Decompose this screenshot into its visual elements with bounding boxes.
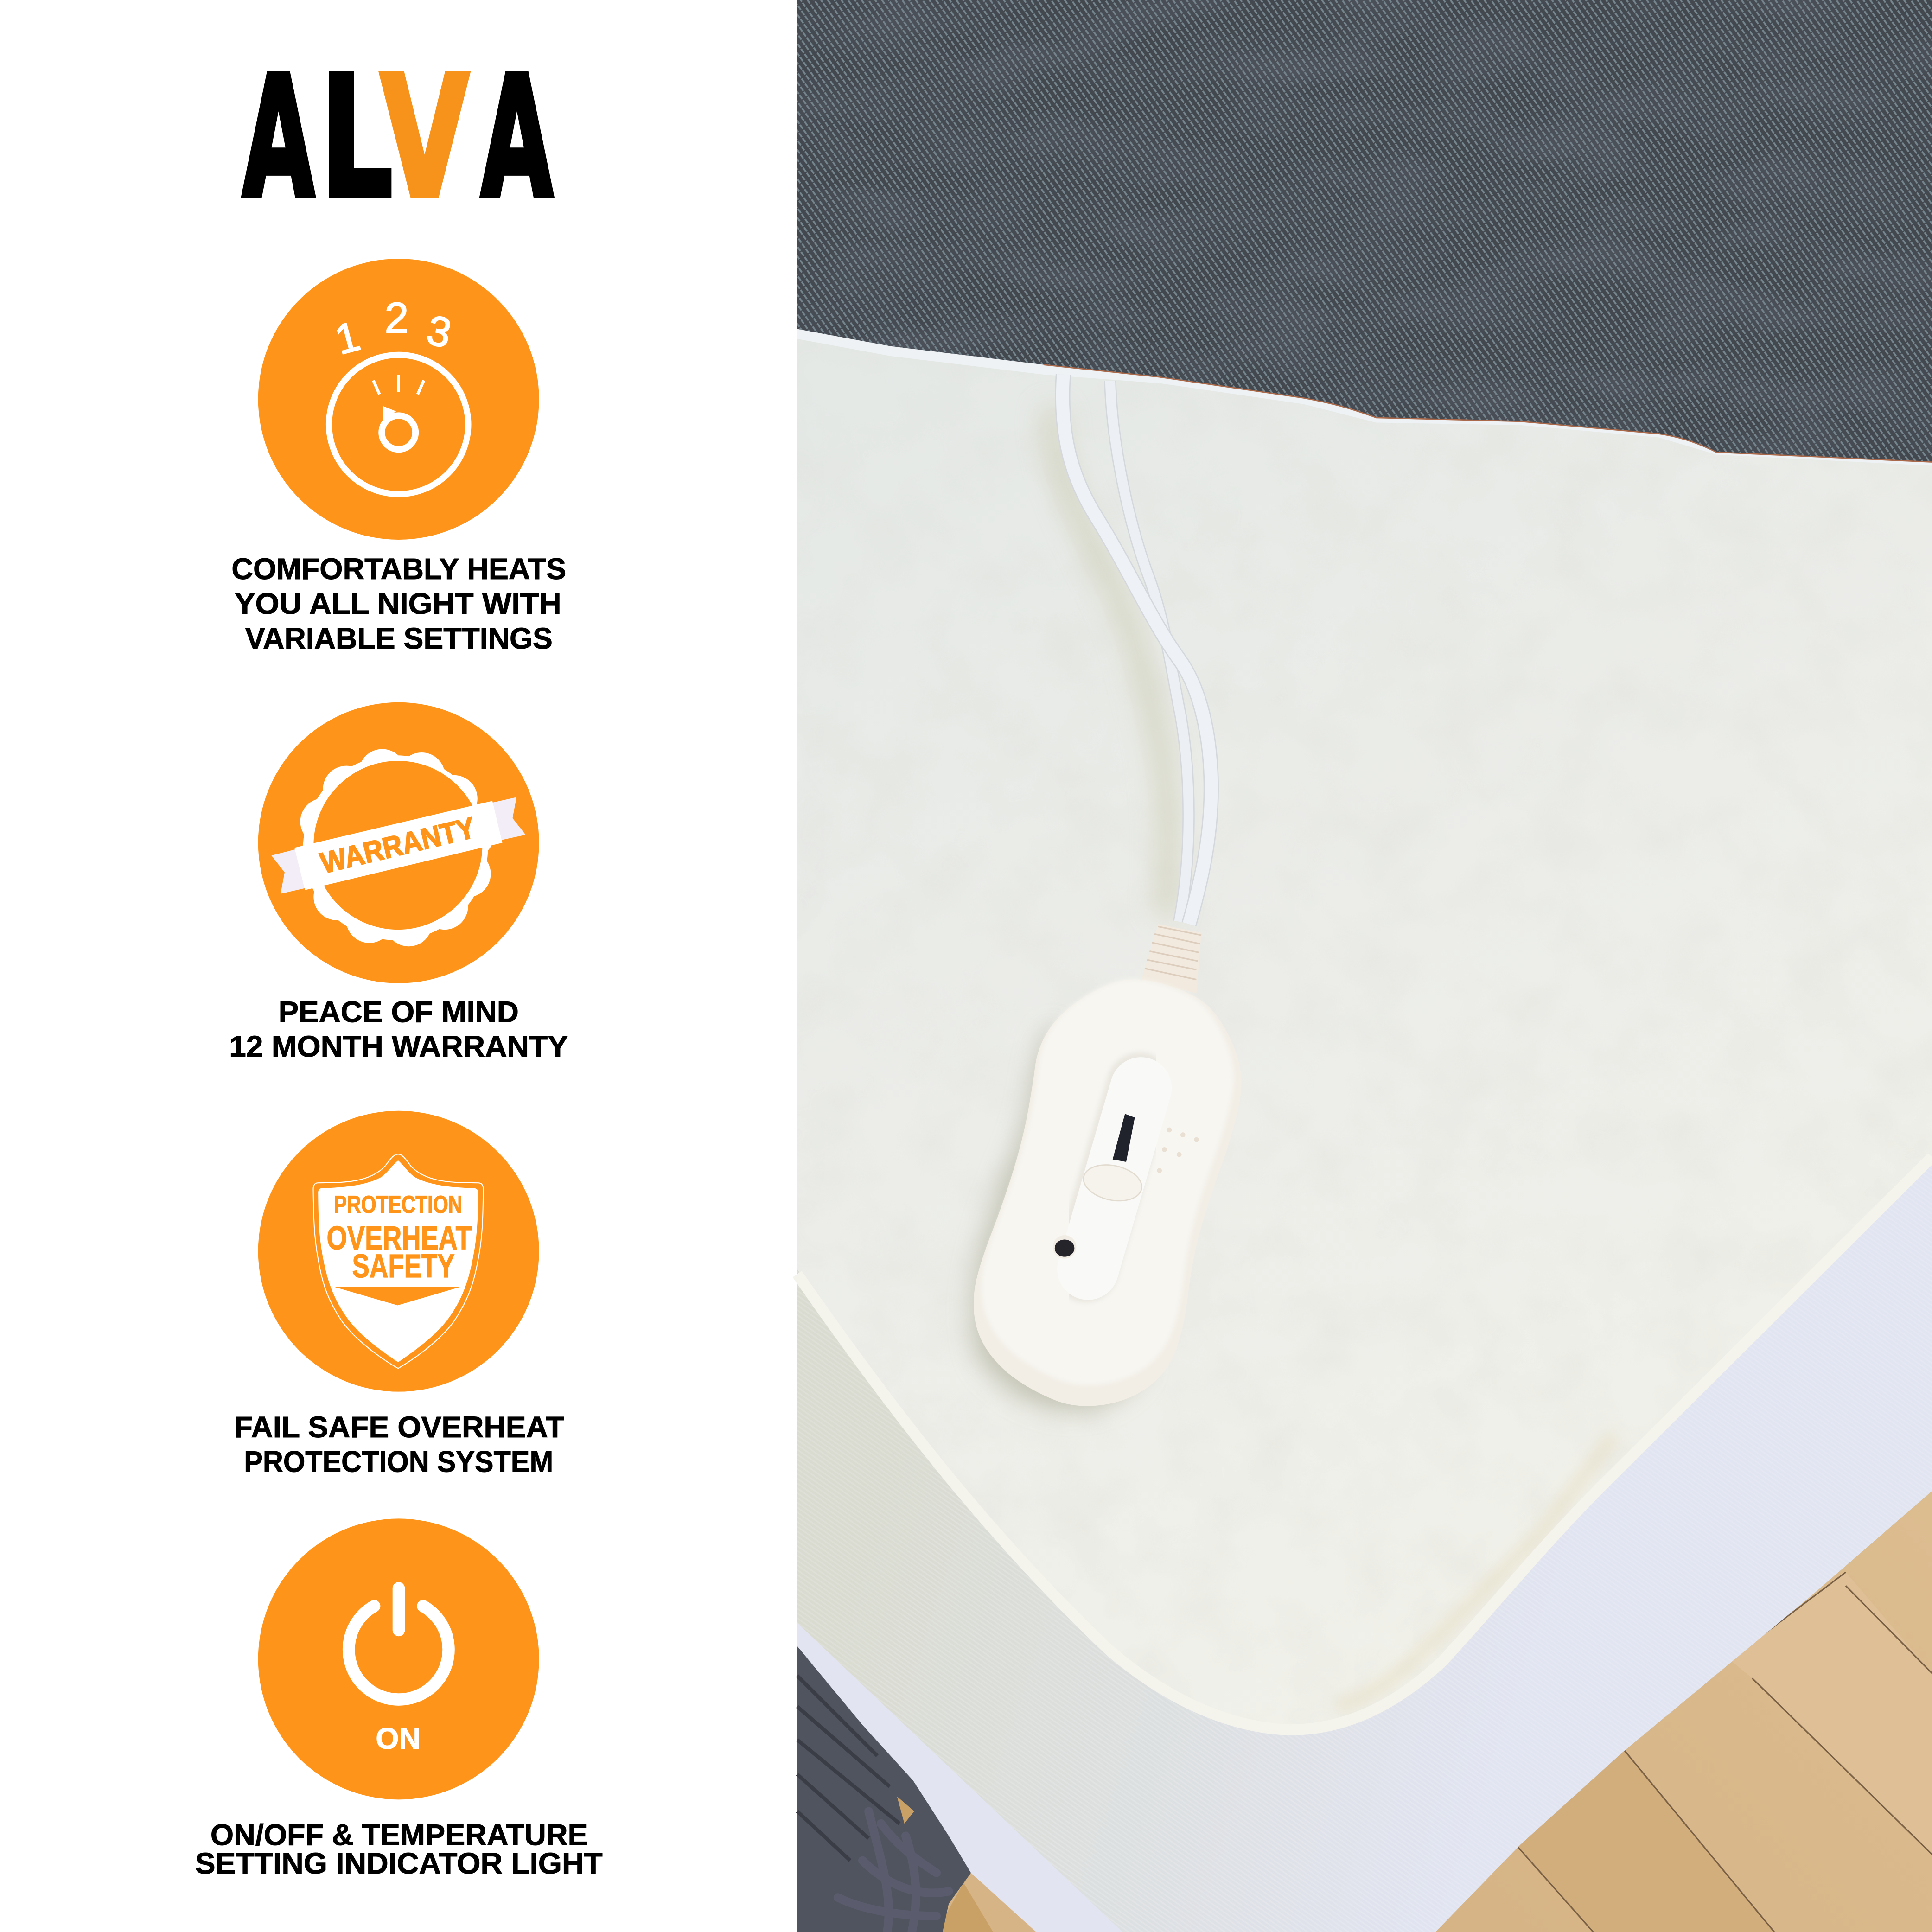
feature 2: warranty [229,702,568,1063]
icon: shield in orange circle [258,1111,539,1392]
icon: dial in orange circle: 2 [385,294,408,342]
logo: ALVA: A [481,42,553,234]
braille dots [1157,1128,1199,1173]
icon: dial in orange circle: 1 [330,312,365,364]
controller shadow [972,1023,1146,1411]
bed sheet [797,1109,1932,1932]
denim cover [797,0,1932,493]
wood floor [797,1417,1932,1932]
caption: fail safe overheat: FAIL SAFE OVERHEAT [234,1410,564,1444]
controller body [974,979,1241,1406]
caption: comfortably heats: VARIABLE SETTINGS [245,622,553,655]
power cords [1053,375,1211,924]
icon: warranty seal with ribbon [258,702,539,983]
caption: on/off temperature: ON/OFF & TEMPERATURE [210,1818,588,1851]
caption: on/off temperature [195,1818,603,1880]
logo: ALVA: A [243,42,315,234]
icon: shield in orange circle: SAFETY [352,1248,455,1285]
blanket hem [797,1157,1932,1730]
icon: warranty seal with ribbon: WARRANTY [317,810,478,880]
caption: on/off temperature: SETTING INDICATOR LIGHT [195,1847,603,1880]
icon: power symbol [258,1518,539,1799]
logo: ALVA [243,42,553,234]
rug with fringe [797,1646,993,1932]
feature 1: variable settings [231,259,566,655]
feature 3: overheat protection [234,1111,564,1478]
caption: fail safe overheat: PROTECTION SYSTEM [244,1445,553,1478]
slider slot [1113,1114,1135,1162]
icon: dial in orange circle: 3 [423,306,455,357]
feature 4: on/off indicator [195,1518,603,1880]
icon: shield in orange circle: PROTECTION [334,1191,462,1218]
indicator lens [1055,1239,1074,1257]
strain relief coil [1141,924,1201,993]
icon: shield in orange circle: OVERHEAT [327,1220,472,1257]
caption: comfortably heats [231,552,566,655]
caption: peace of mind [229,995,568,1063]
blanket [793,339,1932,1735]
slider recess [1085,1085,1140,1269]
caption: comfortably heats: COMFORTABLY HEATS [231,552,566,586]
logo: ALVA: L [320,42,393,234]
indicator light [1053,1235,1076,1259]
slider knob [1080,1160,1145,1206]
photo: heated blanket on bed with controller [797,0,1932,1932]
caption: peace of mind: 12 MONTH WARRANTY [229,1030,568,1063]
logo: ALVA: V [381,42,469,234]
caption: fail safe overheat [234,1410,564,1478]
icon: dial in orange circle [258,259,539,540]
icon: power symbol: ON [376,1722,421,1755]
caption: peace of mind: PEACE OF MIND [279,995,519,1028]
white background panel [0,0,797,1932]
caption: comfortably heats: YOU ALL NIGHT WITH [235,587,561,620]
